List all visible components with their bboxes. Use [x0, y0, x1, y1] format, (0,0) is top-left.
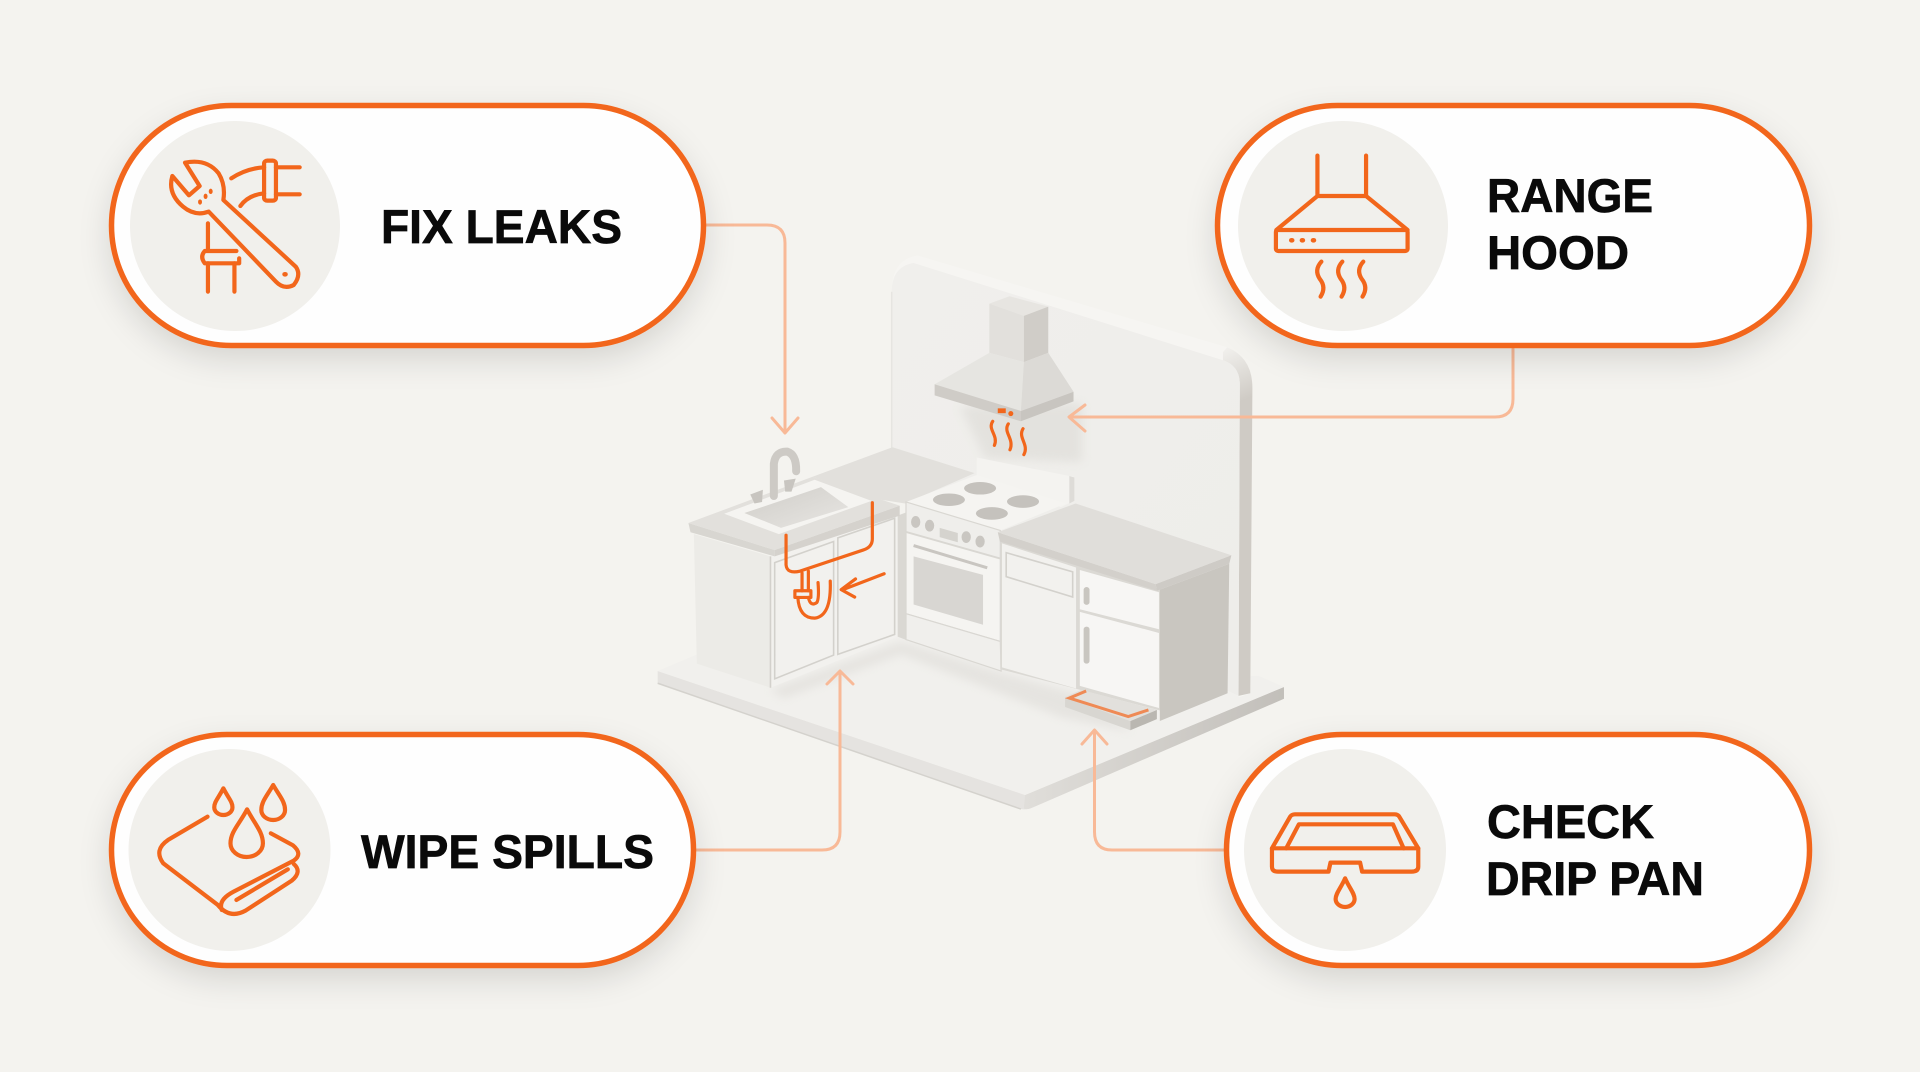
label: range hood: RANGE	[1487, 169, 1653, 222]
label: check drip pan	[1486, 795, 1704, 905]
connector: wipe spills to cabinet	[696, 671, 853, 850]
range hood model	[935, 296, 1074, 421]
label: wipe spills: WIPE SPILLS	[361, 825, 654, 878]
icon backdrop	[128, 749, 330, 951]
panel: check drip pan	[1226, 734, 1810, 966]
kitchen 3D model	[658, 256, 1284, 809]
label: check drip pan: CHECK	[1487, 795, 1654, 848]
icon backdrop	[1238, 121, 1448, 331]
icon: wrench and plug	[171, 161, 300, 292]
icon backdrop	[130, 121, 340, 331]
pill body	[1218, 106, 1810, 346]
left back counter	[813, 447, 975, 503]
pill body	[112, 106, 704, 346]
hood shadow on wall	[960, 403, 1082, 462]
stove	[898, 458, 1074, 671]
sink and faucet	[724, 452, 871, 534]
icon: drip pan	[1272, 814, 1418, 907]
icon: towel and water drops	[159, 785, 298, 914]
drip pan	[1065, 690, 1157, 730]
right counter and cabinets	[998, 503, 1231, 721]
pipe and leak arrow overlay	[786, 503, 884, 618]
label: check drip pan: DRIP PAN	[1486, 852, 1704, 905]
rising steam	[991, 421, 1025, 455]
label: range hood	[1487, 169, 1653, 279]
back wall	[892, 256, 1252, 697]
icon: range hood	[1276, 156, 1408, 297]
label: range hood: HOOD	[1487, 226, 1629, 279]
panel: fix leaks	[112, 106, 704, 346]
label: fix leaks: FIX LEAKS	[381, 200, 622, 253]
panel: wipe spills	[112, 734, 694, 966]
connector: fix leaks to sink	[706, 225, 798, 433]
cabinet floor shadow	[770, 641, 1132, 732]
connector: check drip pan to pan	[1082, 730, 1224, 850]
icon backdrop	[1244, 749, 1446, 951]
connector: range hood to hood	[1069, 349, 1513, 431]
pill body	[112, 734, 694, 966]
sink cabinet	[688, 477, 900, 688]
floor platform	[658, 610, 1284, 809]
panel: range hood	[1218, 106, 1810, 346]
pill body	[1226, 734, 1810, 966]
